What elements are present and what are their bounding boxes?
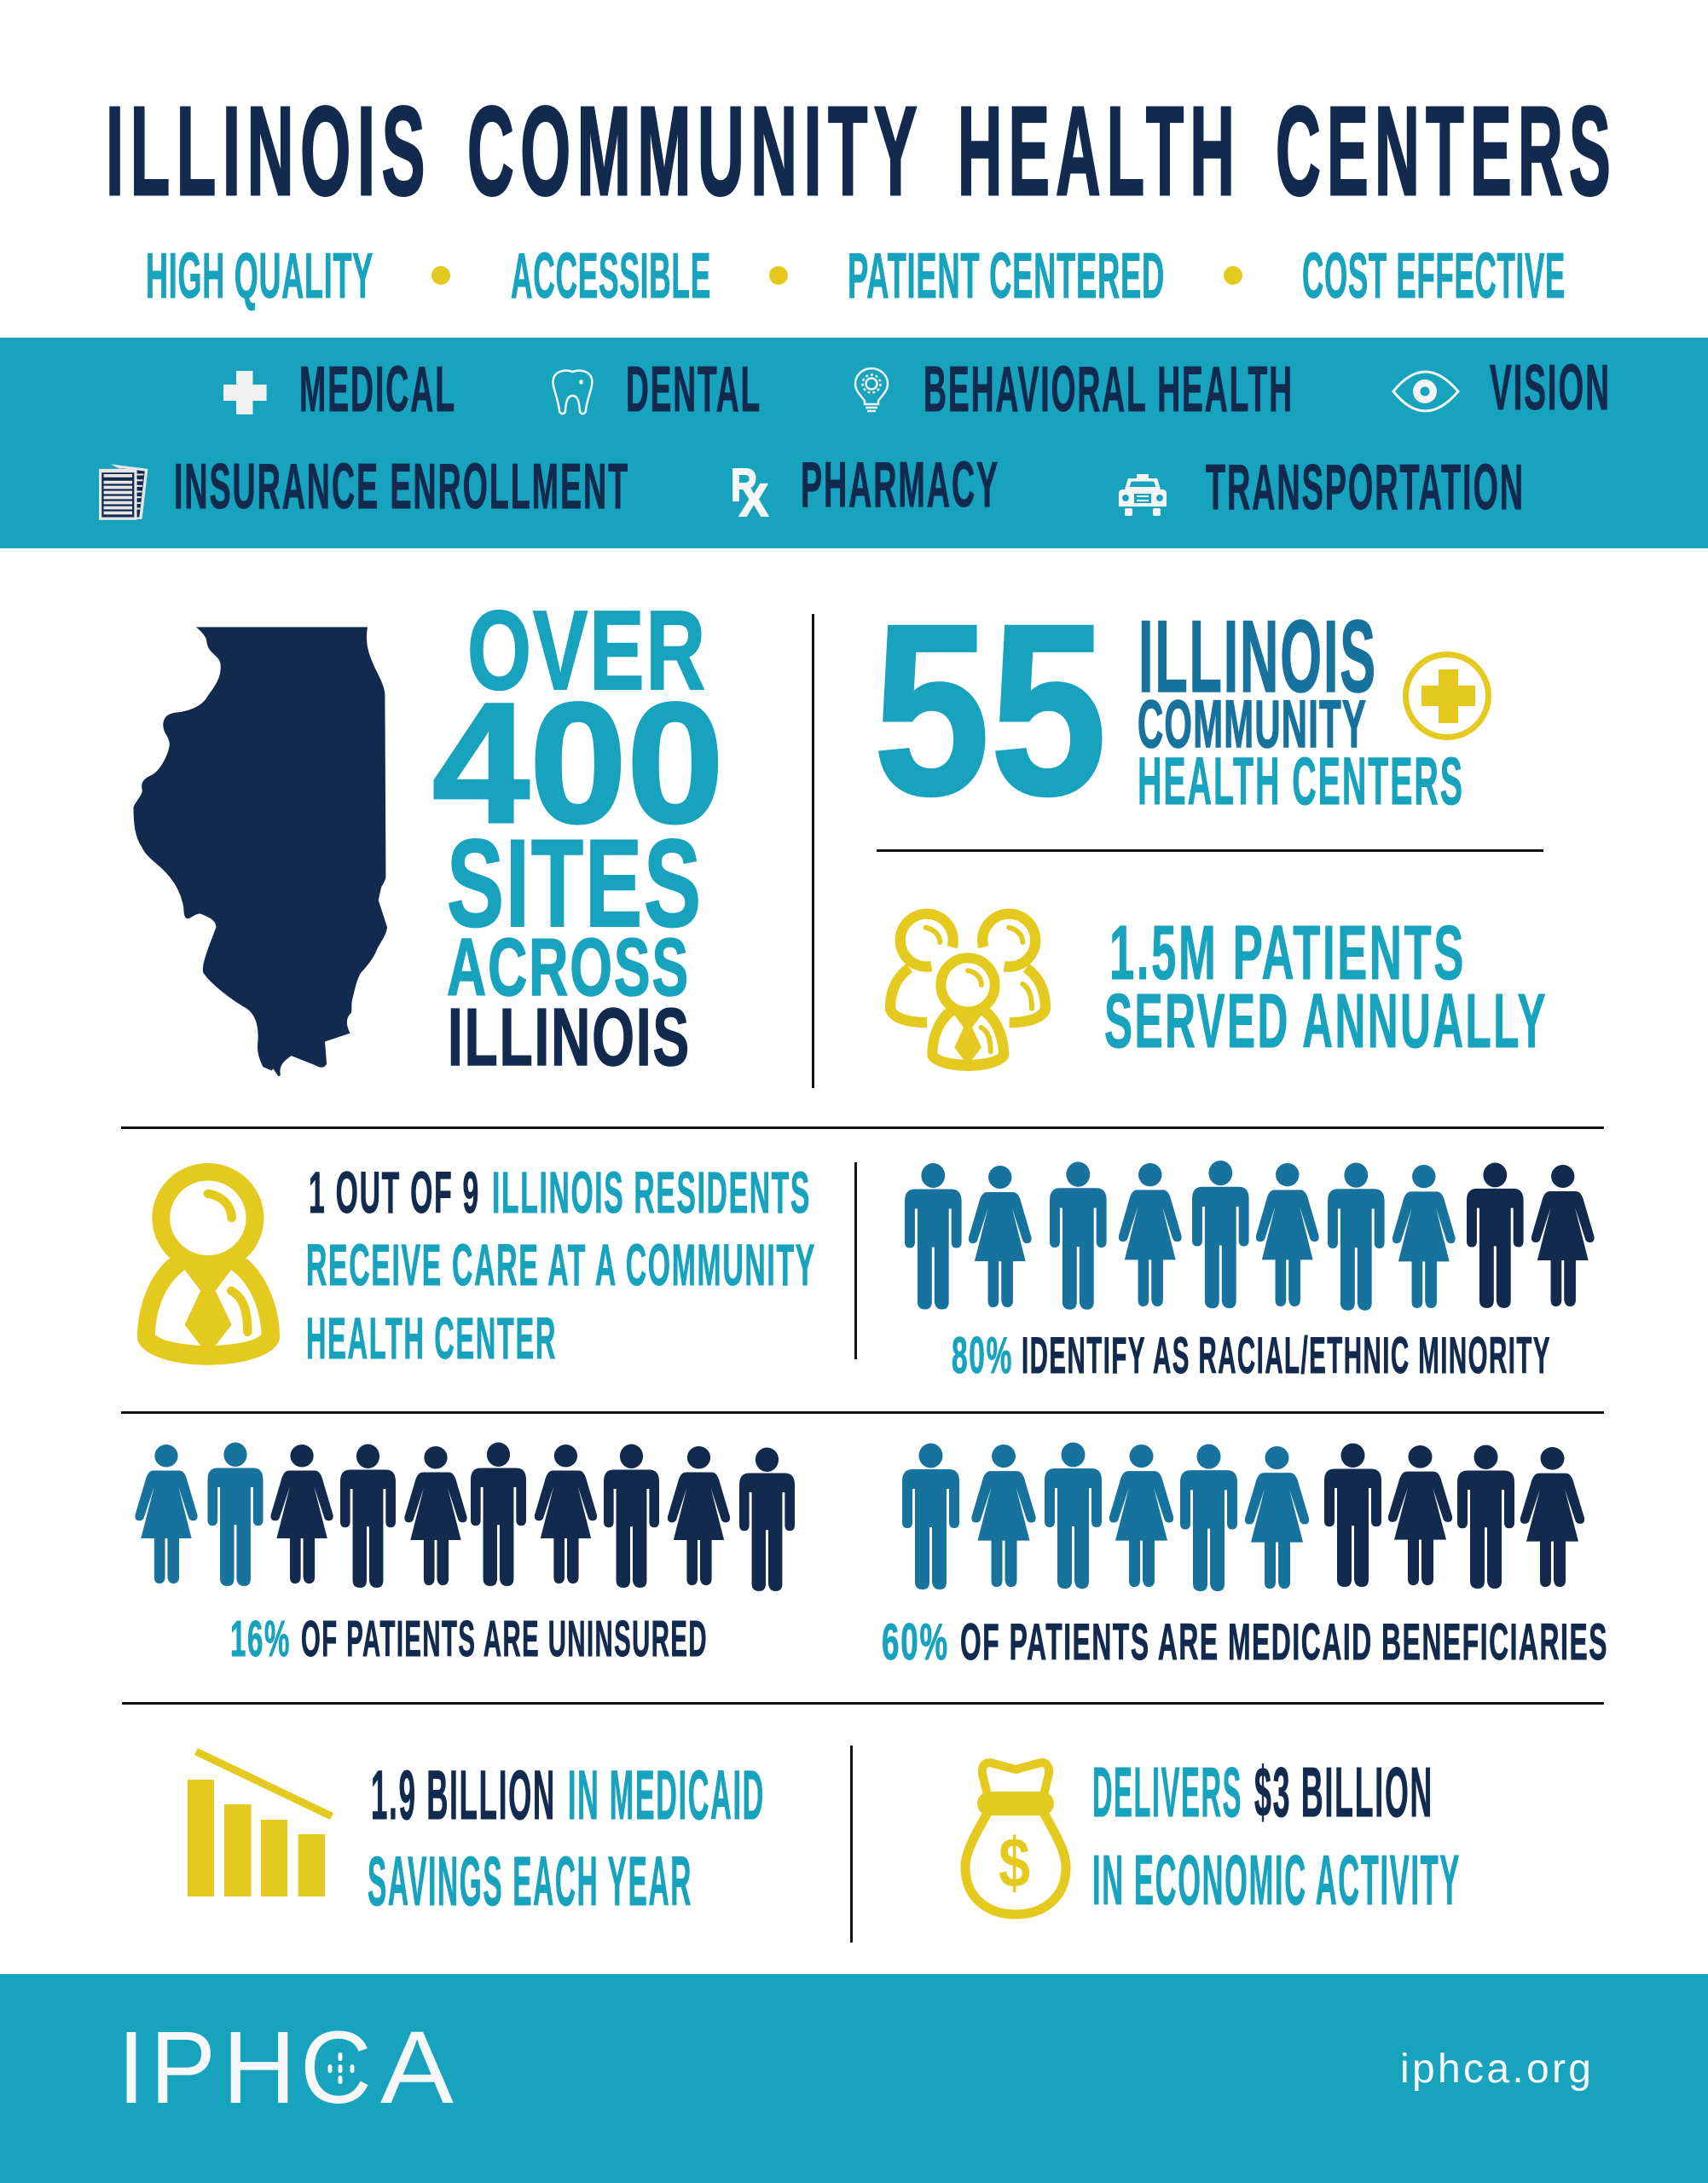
- icon: Rx: X: [739, 475, 768, 526]
- service: pharmacy: PHARMACY: [801, 449, 999, 520]
- stat: 1 out of 9 residents: [306, 1160, 816, 1371]
- icon: documents: [99, 464, 148, 520]
- stat: over 400 sites across Illinois: ILLINOIS: [448, 992, 691, 1083]
- services band: DENTAL: [626, 353, 761, 425]
- title: HEALTH: [958, 81, 1241, 222]
- stat: over 400 sites across Illinois: ACROSS: [447, 922, 690, 1013]
- tagline row: ACCESSIBLE: [511, 240, 711, 311]
- tagline row: [146, 240, 1566, 311]
- logo: IPHCA: [118, 2009, 454, 2125]
- stat: medicaid savings: 1.9 BILLION: [371, 1757, 556, 1834]
- title: COMMUNITY: [467, 81, 923, 222]
- caption: 60% medicaid: 60%: [882, 1613, 949, 1671]
- map: Illinois: [134, 627, 387, 1076]
- text: RECEIVE CARE AT A COMMUNITY: [306, 1232, 816, 1298]
- service: insurance enrollment: INSURANCE ENROLLMENT: [174, 450, 629, 522]
- pictogram: 80% minority: [905, 1161, 1595, 1311]
- text: SAVINGS EACH YEAR: [368, 1843, 692, 1920]
- services band: BEHAVIORAL HEALTH: [923, 353, 1294, 425]
- icon: money bag: $: [999, 1823, 1030, 1902]
- icon: cross in circle: [1405, 655, 1489, 737]
- text: IN MEDICAID: [568, 1757, 765, 1834]
- icon: Rx: R: [731, 460, 757, 511]
- stat: over 400 sites across Illinois: [432, 588, 724, 1083]
- stat: 55: 55: [873, 573, 1107, 846]
- stat label: Illinois community health centers: [1138, 599, 1464, 819]
- stat: 1 out of 9 residents: HEALTH CENTER: [306, 1306, 557, 1371]
- icon: group of patients: [890, 914, 1045, 1071]
- caption: 16% uninsured: 16%: [230, 1611, 291, 1667]
- stat: over 400 sites across Illinois: SITES: [447, 814, 703, 953]
- title: [106, 81, 1617, 222]
- service: medical: MEDICAL: [299, 353, 456, 425]
- stat label: Illinois community health centers: COMMUNITY: [1138, 686, 1367, 761]
- stat: medicaid savings: [368, 1757, 765, 1920]
- icon: declining bar chart: [188, 1748, 333, 1896]
- icon: tooth: [553, 371, 592, 414]
- pictogram: 60% medicaid: [902, 1443, 1584, 1591]
- services band: [0, 338, 1708, 548]
- text: OF PATIENTS ARE UNINSURED: [301, 1611, 708, 1667]
- stat: over 400 sites across Illinois: 400: [432, 667, 724, 859]
- text: ILLINOIS RESIDENTS: [492, 1160, 811, 1225]
- stat: 1.5M patients served annually: 1.5M PATIENTS: [1109, 911, 1466, 996]
- footer band: [0, 1974, 1708, 2183]
- stat: economic activity: DELIVERS: [1092, 1752, 1242, 1832]
- tagline row: PATIENT CENTERED: [848, 240, 1165, 311]
- stat label: Illinois community health centers: ILLINOIS: [1138, 599, 1377, 714]
- logo: IPHCA: H: [223, 2009, 296, 2125]
- icon: light bulb with gear: [855, 368, 888, 411]
- logo: IPHCA: P: [150, 2009, 216, 2125]
- caption: 16% uninsured: [230, 1611, 708, 1667]
- icon: person: [137, 1172, 280, 1365]
- stat: over 400 sites across Illinois: OVER: [467, 588, 707, 713]
- title: ILLINOIS: [106, 81, 431, 222]
- pictogram: 16% uninsured: [135, 1443, 795, 1591]
- text: $3 BILLION: [1254, 1752, 1433, 1832]
- stat: 1 out of 9 residents: 1 OUT OF 9: [309, 1160, 480, 1225]
- icon: taxi: [1119, 474, 1167, 516]
- stat: 1.5M patients served annually: [1104, 911, 1548, 1064]
- stat: economic activity: [1092, 1752, 1461, 1920]
- tagline row: HIGH QUALITY: [146, 240, 373, 311]
- logo: IPHCA: C: [300, 2009, 372, 2125]
- logo: IPHCA: A: [380, 2009, 454, 2125]
- icon: money bag: [965, 1763, 1066, 1914]
- website: iphca.org: [1400, 2047, 1591, 2092]
- icon: Rx: [731, 460, 768, 526]
- caption: 80% identify as minority: 80%: [952, 1327, 1013, 1384]
- icon: eye: [1393, 372, 1458, 411]
- icon: medical cross: [223, 371, 267, 414]
- logo: IPHCA: I: [118, 2009, 145, 2125]
